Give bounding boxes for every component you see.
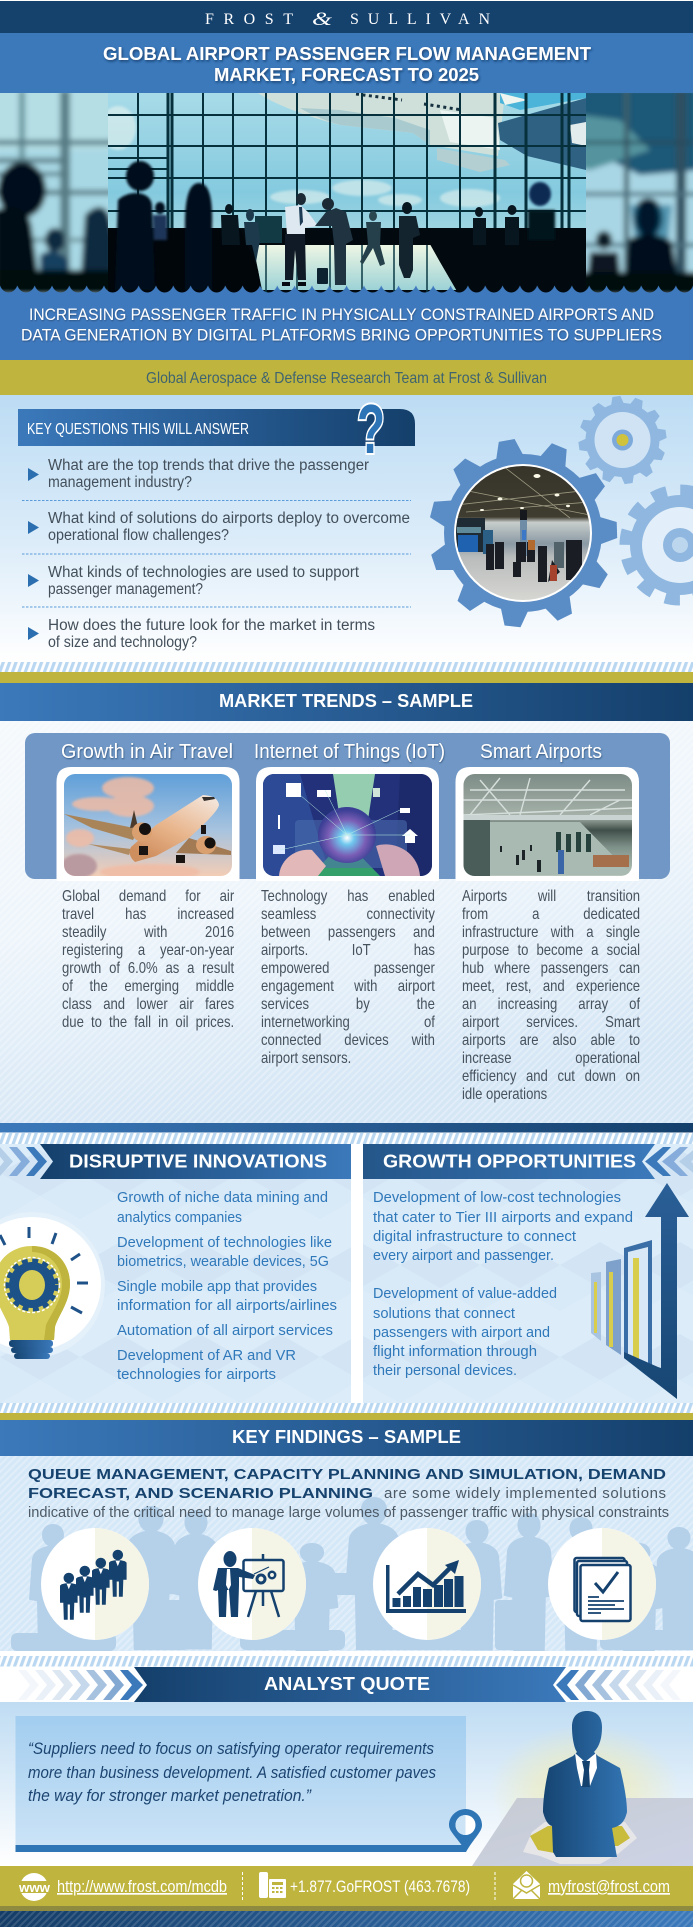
title: GLOBAL AIRPORT PASSENGER FLOW MANAGEMENT bbox=[103, 43, 592, 64]
question 3: What kinds of technologies are used to support bbox=[48, 564, 360, 581]
icon: telephone bbox=[259, 1872, 286, 1898]
list: disruptive innovations: Single mobile app that provides bbox=[117, 1278, 317, 1295]
icon: light bulb with gear bbox=[0, 1212, 105, 1359]
question 2: What kind of solutions do airports deploy to overcome bbox=[48, 510, 410, 527]
text: internet of things: Technology has enabled bbox=[261, 888, 435, 905]
blurred left side of photo bbox=[0, 93, 108, 292]
quote box: “Suppliers need to focus on satisfying operator requirements bbox=[28, 1740, 434, 1758]
text: growth opportunities: Development of value-added bbox=[373, 1285, 557, 1302]
text: smart airports: airport services. Smart bbox=[462, 1014, 640, 1031]
header bar: Frost & Sullivan bbox=[0, 1, 693, 33]
title: MARKET, FORECAST TO 2025 bbox=[214, 64, 479, 85]
fuselage bbox=[130, 795, 219, 862]
column: internet of things: Internet of Things (IoT) bbox=[254, 741, 445, 763]
question 2 bbox=[28, 510, 410, 544]
background crowd silhouettes bbox=[11, 1497, 693, 1651]
text: key findings: FORECAST, AND SCENARIO PLANNING bbox=[28, 1485, 373, 1502]
window grid bbox=[108, 93, 586, 228]
text: growth opportunities: passengers with airport and bbox=[373, 1324, 550, 1341]
text: growth opportunities: solutions that connect bbox=[373, 1305, 516, 1322]
text: internet of things: services by the bbox=[261, 996, 435, 1013]
text: internet of things: between passengers and bbox=[261, 924, 435, 941]
list: disruptive innovations: Growth of niche data mining and bbox=[117, 1189, 328, 1206]
text: internet of things: engagement with airport bbox=[261, 978, 435, 995]
icon: growth arrow with bars bbox=[591, 1183, 689, 1399]
text: smart airports: meet, rest, and experience bbox=[462, 978, 640, 995]
text: growth opportunities: Development of low-cost technologies bbox=[373, 1189, 621, 1206]
text: growth in air travel: steadily with 2016 bbox=[62, 924, 234, 941]
question 1 bbox=[28, 457, 369, 491]
section heading: market trends bbox=[0, 672, 693, 721]
title bbox=[103, 43, 592, 85]
question 4: of size and technology? bbox=[48, 634, 197, 651]
research team band bbox=[0, 360, 693, 395]
logo text bbox=[205, 9, 490, 30]
subtitle text: DATA GENERATION BY DIGITAL PLATFORMS BRING OPPORTUNITIES TO SUPPLIERS bbox=[21, 326, 662, 344]
blurred right side of photo bbox=[586, 93, 693, 292]
text: growth opportunities: that cater to Tier III airports and expand bbox=[373, 1209, 633, 1226]
logo text: FROST bbox=[205, 11, 293, 28]
banner: disruptive innovations: DISRUPTIVE INNOVATIONS bbox=[69, 1152, 327, 1172]
quote box bbox=[16, 1716, 466, 1852]
banner: disruptive innovations bbox=[40, 1144, 351, 1179]
text: smart airports: purpose to become a social bbox=[462, 942, 640, 959]
phone number: +1.877.GoFROST (463.7678) bbox=[290, 1877, 470, 1896]
subtitle text: INCREASING PASSENGER TRAFFIC IN PHYSICALLY CONSTRAINED AIRPORTS AND bbox=[29, 306, 654, 324]
text: key findings: indicative of the critical need to manage large volumes of passenger traffic with physical constraints bbox=[28, 1504, 669, 1521]
text: internet of things: internetworking of bbox=[261, 1014, 435, 1031]
text: growth opportunities: every airport and passenger. bbox=[373, 1247, 554, 1264]
question 3: passenger management? bbox=[48, 581, 203, 598]
section heading: analyst quote bbox=[18, 1667, 681, 1702]
subtitle band bbox=[0, 293, 693, 360]
text: growth opportunities: digital infrastructure to connect bbox=[373, 1228, 577, 1245]
icon: www: www bbox=[18, 1880, 51, 1895]
text: internet of things: connected devices with bbox=[261, 1032, 435, 1049]
section heading: key findings bbox=[0, 1413, 693, 1456]
text: smart airports: airports are also able to bbox=[462, 1032, 640, 1049]
list: disruptive innovations: Development of AR and VR bbox=[117, 1347, 296, 1364]
icon: gear right edge bbox=[625, 490, 693, 600]
list: disruptive innovations bbox=[117, 1189, 337, 1383]
text: smart airports: Airports will transition bbox=[462, 888, 640, 905]
banner: growth opportunities bbox=[363, 1144, 655, 1179]
icon: checked documents bbox=[548, 1528, 656, 1640]
icon: small gear top right bbox=[578, 395, 667, 485]
logo text: SULLIVAN bbox=[350, 11, 490, 28]
list: disruptive innovations: technologies for airports bbox=[117, 1366, 276, 1383]
text: key findings: QUEUE MANAGEMENT, CAPACITY PLANNING AND SIMULATION, DEMAND bbox=[28, 1466, 666, 1483]
panel: key findings bbox=[0, 1456, 693, 1651]
image card: airplane bbox=[56, 767, 240, 881]
text: smart airports: efficiency and cut down on bbox=[462, 1068, 640, 1085]
text: growth opportunities: their personal devices. bbox=[373, 1362, 517, 1379]
text: growth in air travel: of the emerging middle bbox=[62, 978, 234, 995]
text: smart airports: hub where passengers can bbox=[462, 960, 640, 977]
text: smart airports: an increasing array of bbox=[462, 996, 640, 1013]
question 4 bbox=[28, 617, 375, 651]
sharp centre of photo bbox=[100, 93, 586, 293]
question 1: management industry? bbox=[48, 474, 192, 491]
column: smart airports: Smart Airports bbox=[480, 741, 602, 763]
question 1: What are the top trends that drive the passenger bbox=[48, 457, 369, 474]
question 4: How does the future look for the market in terms bbox=[48, 617, 375, 634]
blue heading panel bbox=[25, 733, 670, 879]
quote box: more than business development. A satisfied customer paves bbox=[28, 1764, 436, 1782]
chevrons left bbox=[0, 1147, 47, 1176]
text: growth in air travel: travel has increased bbox=[62, 906, 234, 923]
text: growth opportunities: flight information through bbox=[373, 1343, 537, 1360]
icon: rising chart bbox=[373, 1528, 481, 1640]
question 3 bbox=[28, 564, 360, 598]
panel: analyst quote bbox=[0, 1702, 693, 1866]
text: growth in air travel: Global demand for air bbox=[62, 888, 234, 905]
panel: key questions bbox=[0, 390, 693, 662]
scalloped edge bbox=[0, 286, 693, 294]
list: disruptive innovations: biometrics, wearable devices, 5G bbox=[117, 1253, 329, 1270]
text: internet of things: empowered passenger bbox=[261, 960, 435, 977]
text: growth in air travel: growth of 6.0% as a result bbox=[62, 960, 234, 977]
banner: key questions bbox=[18, 409, 415, 446]
stripe band bbox=[0, 1133, 693, 1144]
column: growth in air travel bbox=[56, 741, 240, 1038]
stripe band bbox=[0, 1403, 693, 1413]
central businessmen bbox=[282, 193, 353, 286]
column: smart airports bbox=[456, 741, 640, 1113]
section heading: key findings: KEY FINDINGS – SAMPLE bbox=[232, 1427, 461, 1447]
text: internet of things: airports. IoT has bbox=[261, 942, 435, 959]
image card: IoT bbox=[256, 767, 439, 881]
list: disruptive innovations: information for all airports/airlines bbox=[117, 1297, 337, 1314]
airplane bbox=[258, 93, 586, 172]
text: growth in air travel: registering a year-on-year bbox=[62, 942, 234, 959]
column: internet of things bbox=[254, 741, 445, 1078]
footer contact bar bbox=[0, 1866, 693, 1927]
list: disruptive innovations: analytics companies bbox=[117, 1209, 242, 1226]
text: growth opportunities bbox=[373, 1189, 633, 1379]
floor and glow bbox=[472, 1725, 693, 1866]
text: internet of things: airport sensors. bbox=[261, 1050, 351, 1067]
text: key findings bbox=[28, 1466, 669, 1521]
question 2: operational flow challenges? bbox=[48, 527, 229, 544]
icon: question mark: ? bbox=[357, 390, 385, 468]
icon: www bbox=[18, 1873, 51, 1901]
icon: email envelope bbox=[513, 1871, 540, 1899]
icon: people queue bbox=[41, 1528, 149, 1640]
text: smart airports: infrastructure with a single bbox=[462, 924, 640, 941]
text: internet of things bbox=[261, 888, 435, 1078]
clouds bbox=[100, 106, 500, 207]
text: internet of things: seamless connectivity bbox=[261, 906, 435, 923]
logo text: & bbox=[312, 9, 332, 30]
banner: growth opportunities: GROWTH OPPORTUNITIES bbox=[383, 1152, 636, 1172]
text: smart airports: idle operations bbox=[462, 1086, 547, 1103]
text: growth in air travel bbox=[62, 888, 234, 1038]
divider bar bbox=[0, 1123, 693, 1132]
text: smart airports: from a dedicated bbox=[462, 906, 640, 923]
icon: analyst silhouette in torn paper bbox=[523, 1711, 637, 1864]
column: growth in air travel: Growth in Air Travel bbox=[61, 741, 233, 763]
email link: myfrost@frost.com bbox=[548, 1877, 670, 1896]
seats bbox=[255, 216, 282, 243]
photo: airport hall bbox=[455, 466, 591, 600]
title band bbox=[0, 33, 693, 93]
section heading: analyst quote: ANALYST QUOTE bbox=[264, 1674, 430, 1694]
chevrons right bbox=[645, 1147, 693, 1176]
hero photo: silhouettes at airport window bbox=[0, 88, 693, 298]
text: growth in air travel: class and lower air fares bbox=[62, 996, 234, 1013]
research team band: Global Aerospace & Defense Research Team at Frost & Sullivan bbox=[146, 370, 547, 387]
subtitle text bbox=[21, 306, 662, 344]
icon: presenter with board bbox=[198, 1528, 306, 1640]
stripe band bbox=[0, 662, 693, 672]
text: key findings: are some widely implemented solutions bbox=[384, 1485, 666, 1502]
list: disruptive innovations: Development of technologies like bbox=[117, 1234, 332, 1251]
banner: key questions: KEY QUESTIONS THIS WILL ANSWER bbox=[27, 421, 249, 438]
quote box: the way for stronger market penetration.” bbox=[28, 1787, 312, 1805]
panel: growth opportunities bbox=[363, 1144, 693, 1403]
icon: location pin bbox=[449, 1809, 482, 1852]
icon: large gear bbox=[428, 438, 617, 628]
far wing and tail bbox=[64, 814, 139, 840]
other silhouettes bbox=[115, 161, 212, 290]
website link: http://www.frost.com/mcdb bbox=[57, 1877, 227, 1896]
text: smart airports: increase operational bbox=[462, 1050, 640, 1067]
floor bbox=[240, 228, 586, 292]
text: growth in air travel: due to the fall in oil prices. bbox=[62, 1014, 234, 1031]
panel: market trends bbox=[0, 721, 693, 1123]
list: disruptive innovations: Automation of all airport services bbox=[117, 1322, 333, 1339]
text: smart airports bbox=[462, 888, 640, 1113]
image card: airport interior bbox=[456, 767, 639, 881]
section heading: market trends: MARKET TRENDS – SAMPLE bbox=[219, 691, 473, 711]
panel: disruptive innovations bbox=[0, 1144, 351, 1403]
stripe band bbox=[0, 1656, 693, 1666]
question list bbox=[22, 457, 411, 651]
